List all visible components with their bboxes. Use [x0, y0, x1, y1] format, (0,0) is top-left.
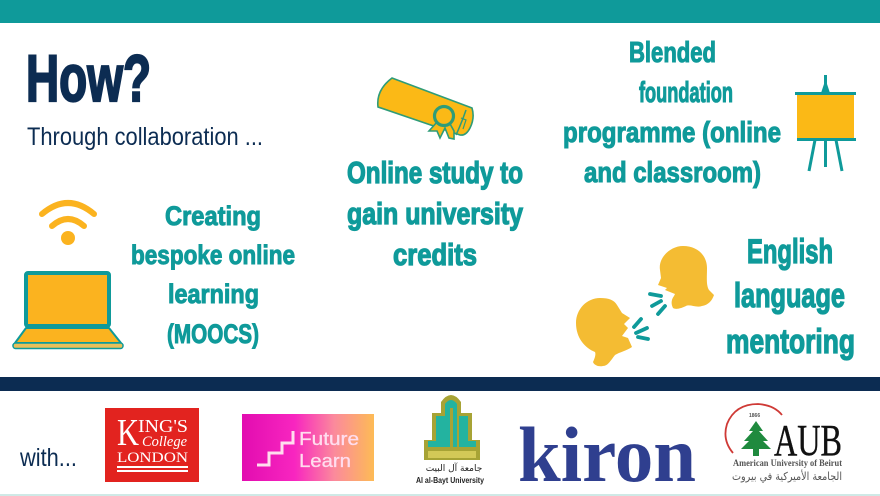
logo: FutureLearn: Future — [299, 429, 359, 449]
left head — [576, 298, 632, 366]
text block: bespoke online learning: bespoke online — [131, 240, 295, 270]
text block: English language mentoring: language — [734, 277, 845, 315]
logo: American University of Beirut: 1866 — [749, 413, 760, 419]
text block: bespoke online learning: Creating — [165, 201, 261, 231]
text block: online study: gain university — [347, 196, 524, 231]
text block: blended foundation: programme (online — [563, 117, 781, 149]
right head — [658, 246, 714, 309]
text block: blended foundation: foundation — [639, 77, 733, 109]
text block: blended foundation — [563, 37, 781, 189]
logo: Al al-Bayt University: Al al-Bayt University — [416, 476, 484, 485]
icon: speaking heads — [576, 246, 714, 366]
logo: King's College London: College — [142, 434, 187, 450]
icon: wifi signal — [42, 203, 94, 245]
text block: English language mentoring: English — [747, 233, 833, 271]
title: How? — [26, 41, 151, 115]
logo: American University of Beirut — [725, 404, 843, 483]
top bar — [0, 0, 880, 23]
logo: Al al-Bayt University: جامعة آل البيت — [426, 462, 482, 474]
text block: online study: Online study to — [347, 155, 523, 190]
text block: bespoke online learning: (MOOCS) — [167, 319, 259, 349]
icon: diploma scroll — [378, 78, 473, 139]
logo: King's College London: K — [117, 412, 139, 454]
logo: FutureLearn — [242, 414, 374, 481]
icon: presentation easel — [795, 75, 856, 171]
icon: laptop — [13, 273, 123, 348]
logo: American University of Beirut: AUB — [774, 416, 842, 465]
logo: King's College London: ING'S — [138, 416, 188, 436]
text block: blended foundation: Blended — [629, 37, 716, 69]
logo: kiron: kiron — [518, 411, 696, 496]
navy divider bar — [0, 377, 880, 391]
text block: English language mentoring — [726, 233, 855, 361]
text block: bespoke online learning: learning — [168, 279, 259, 309]
text block: online study — [347, 155, 524, 272]
speech marks — [634, 294, 665, 339]
text block: online study: credits — [393, 237, 477, 272]
subtitle: Through collaboration ... — [27, 123, 263, 151]
logo: Al al-Bayt University — [416, 395, 484, 485]
text block: blended foundation: and classroom) — [584, 157, 761, 189]
text block: bespoke online learning — [131, 201, 295, 349]
logo: King's College London: LONDON — [117, 450, 188, 466]
logo: American University of Beirut: الجامعة الأميركية في بيروت — [732, 469, 842, 483]
logo: FutureLearn: Learn — [299, 451, 351, 471]
bottom edge strip — [0, 494, 880, 496]
logo: American University of Beirut: American University of Beirut — [733, 459, 843, 469]
label: with: with... — [19, 444, 77, 472]
logo: King's College London — [105, 408, 199, 482]
